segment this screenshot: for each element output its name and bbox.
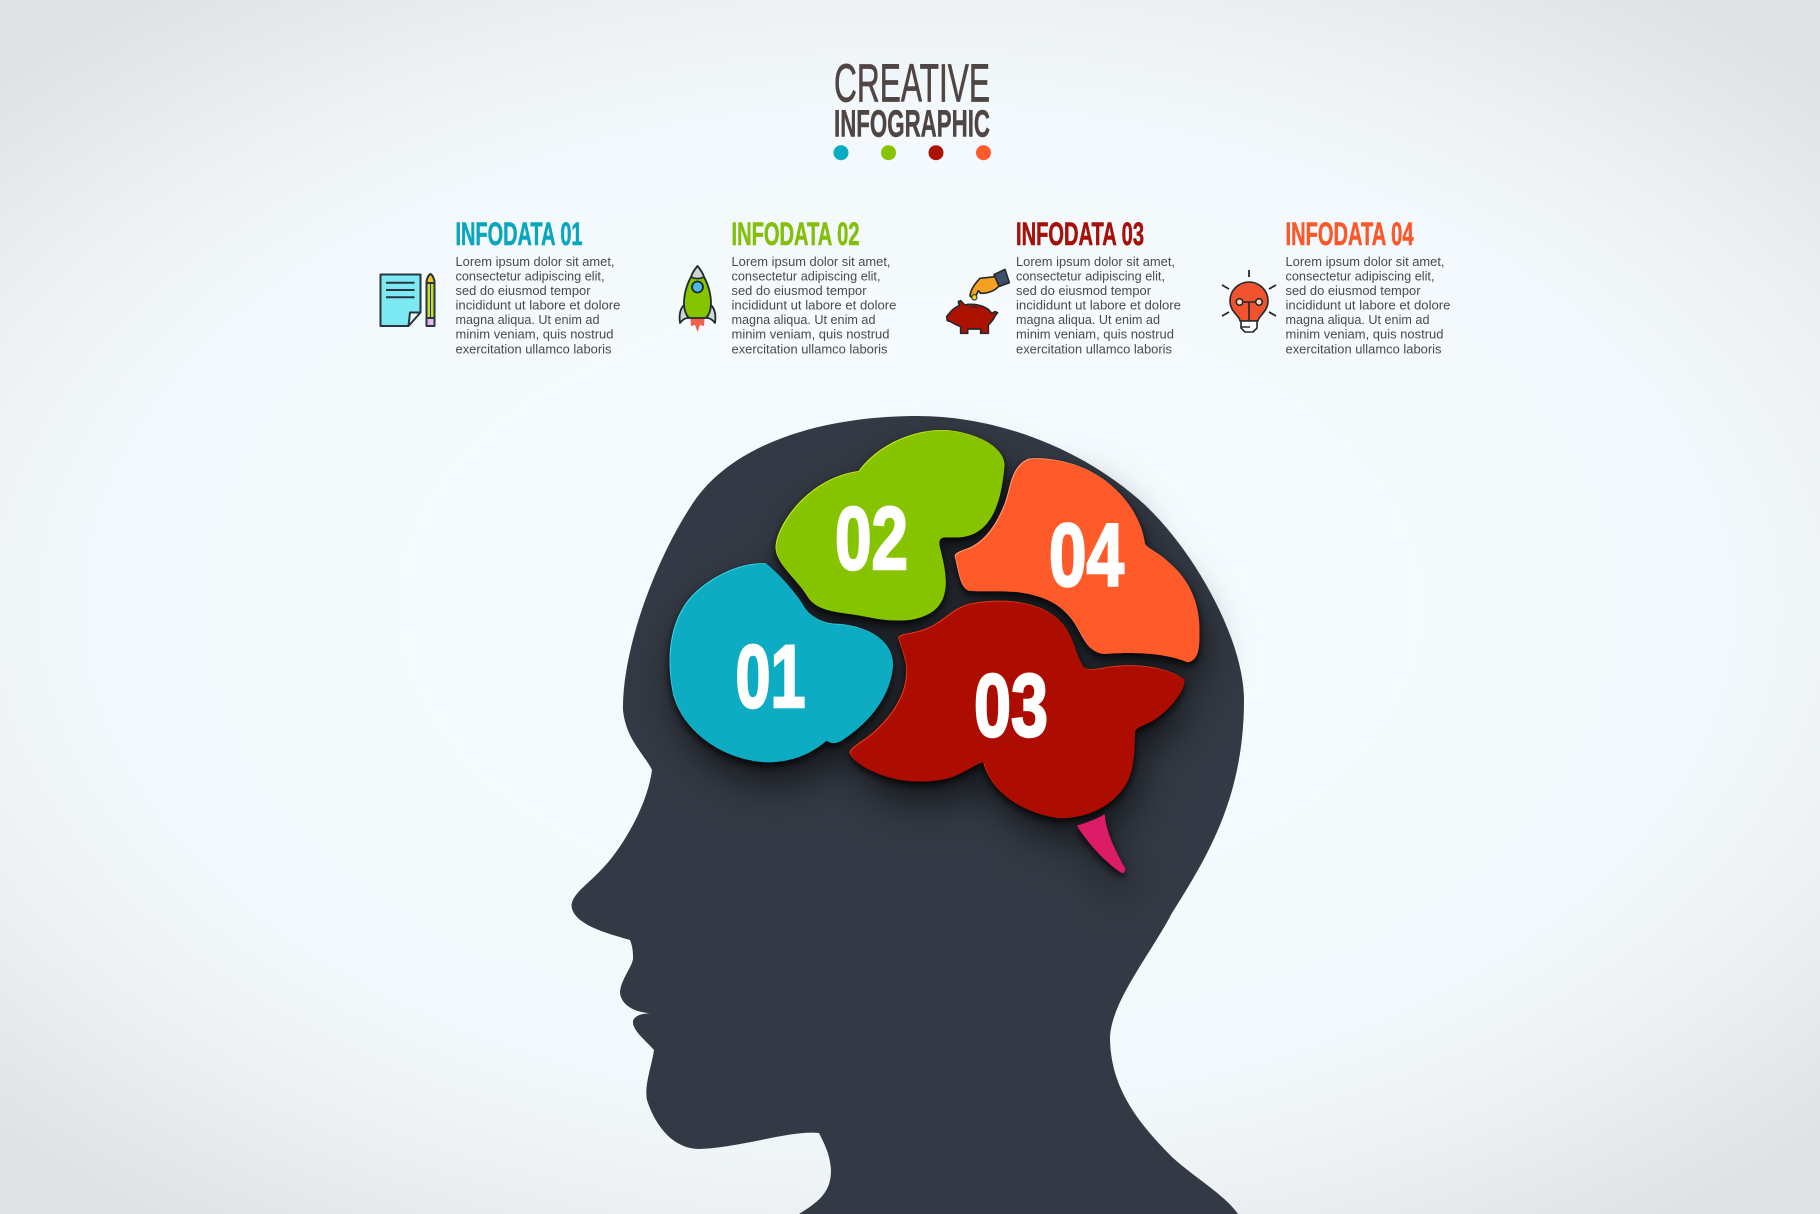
text block 03: Lorem ipsum dolor sit amet, xyxy=(1016,254,1175,269)
text block 04: Lorem ipsum dolor sit amet, xyxy=(1286,254,1444,269)
text block 04: incididunt ut labore et dolore xyxy=(1286,298,1450,313)
text block 03: consectetur adipiscing elit, xyxy=(1016,268,1165,284)
text block 03: minim veniam, quis nostrud xyxy=(1016,327,1174,342)
icon: document and pencil xyxy=(380,274,434,326)
title xyxy=(834,54,990,146)
brain lobe 01 xyxy=(670,563,893,762)
number 01: 01 xyxy=(736,626,806,726)
number 02: 02 xyxy=(835,488,908,588)
text block 04: exercitation ullamco laboris xyxy=(1286,341,1442,356)
brain lobe 04 xyxy=(955,458,1199,662)
text block 01: magna aliqua. Ut enim ad xyxy=(456,312,600,327)
text block 04: magna aliqua. Ut enim ad xyxy=(1286,312,1430,327)
text block 02: Lorem ipsum dolor sit amet, xyxy=(732,254,890,269)
number 04: 04 xyxy=(1049,504,1124,604)
text block 01: Lorem ipsum dolor sit amet, xyxy=(456,254,614,269)
heading 02: INFODATA 02 xyxy=(732,216,860,252)
text block 02: consectetur adipiscing elit, xyxy=(732,268,880,284)
heading 03: INFODATA 03 xyxy=(1016,216,1144,252)
title colour dots xyxy=(834,145,991,160)
title: INFOGRAPHIC xyxy=(834,104,990,146)
text block 04: minim veniam, quis nostrud xyxy=(1286,327,1444,342)
text block 03: magna aliqua. Ut enim ad xyxy=(1016,312,1160,327)
text block 01: incididunt ut labore et dolore xyxy=(456,298,620,313)
text block 04: consectetur adipiscing elit, xyxy=(1286,268,1434,284)
text block 02: minim veniam, quis nostrud xyxy=(732,327,890,342)
text block 04 xyxy=(1286,254,1450,356)
text block 03: exercitation ullamco laboris xyxy=(1016,341,1172,356)
text block 01: minim veniam, quis nostrud xyxy=(456,327,614,342)
panel: infodata 03 xyxy=(947,216,1181,356)
panel: infodata 04 xyxy=(1222,216,1450,356)
panel: infodata 01 xyxy=(380,216,620,356)
text block 04: sed do eiusmod tempor xyxy=(1286,283,1421,298)
brain xyxy=(670,430,1199,873)
text block 03: incididunt ut labore et dolore xyxy=(1016,298,1181,313)
text block 02: exercitation ullamco laboris xyxy=(732,341,888,356)
text block 02 xyxy=(732,254,896,356)
icon: light bulb xyxy=(1222,270,1276,332)
number 03: 03 xyxy=(974,655,1048,755)
brain lobe stem (pink) xyxy=(1077,814,1125,873)
text block 01: consectetur adipiscing elit, xyxy=(456,268,604,284)
text block 03: sed do eiusmod tempor xyxy=(1016,283,1152,298)
text block 01: exercitation ullamco laboris xyxy=(456,341,612,356)
brain lobe 02 xyxy=(776,430,1005,621)
text block 02: sed do eiusmod tempor xyxy=(732,283,867,298)
text block 03 xyxy=(1016,254,1181,356)
text block 01: sed do eiusmod tempor xyxy=(456,283,591,298)
heading 01: INFODATA 01 xyxy=(456,216,582,252)
text block 02: magna aliqua. Ut enim ad xyxy=(732,312,876,327)
icon: rocket xyxy=(680,266,715,332)
heading 04: INFODATA 04 xyxy=(1286,216,1414,252)
head silhouette xyxy=(572,416,1244,1214)
text block 01 xyxy=(456,254,620,356)
text block 02: incididunt ut labore et dolore xyxy=(732,298,896,313)
title: CREATIVE xyxy=(834,54,990,114)
brain lobe 03 xyxy=(850,601,1185,818)
panel: infodata 02 xyxy=(680,216,896,356)
icon: hand and piggy bank xyxy=(947,269,1009,333)
